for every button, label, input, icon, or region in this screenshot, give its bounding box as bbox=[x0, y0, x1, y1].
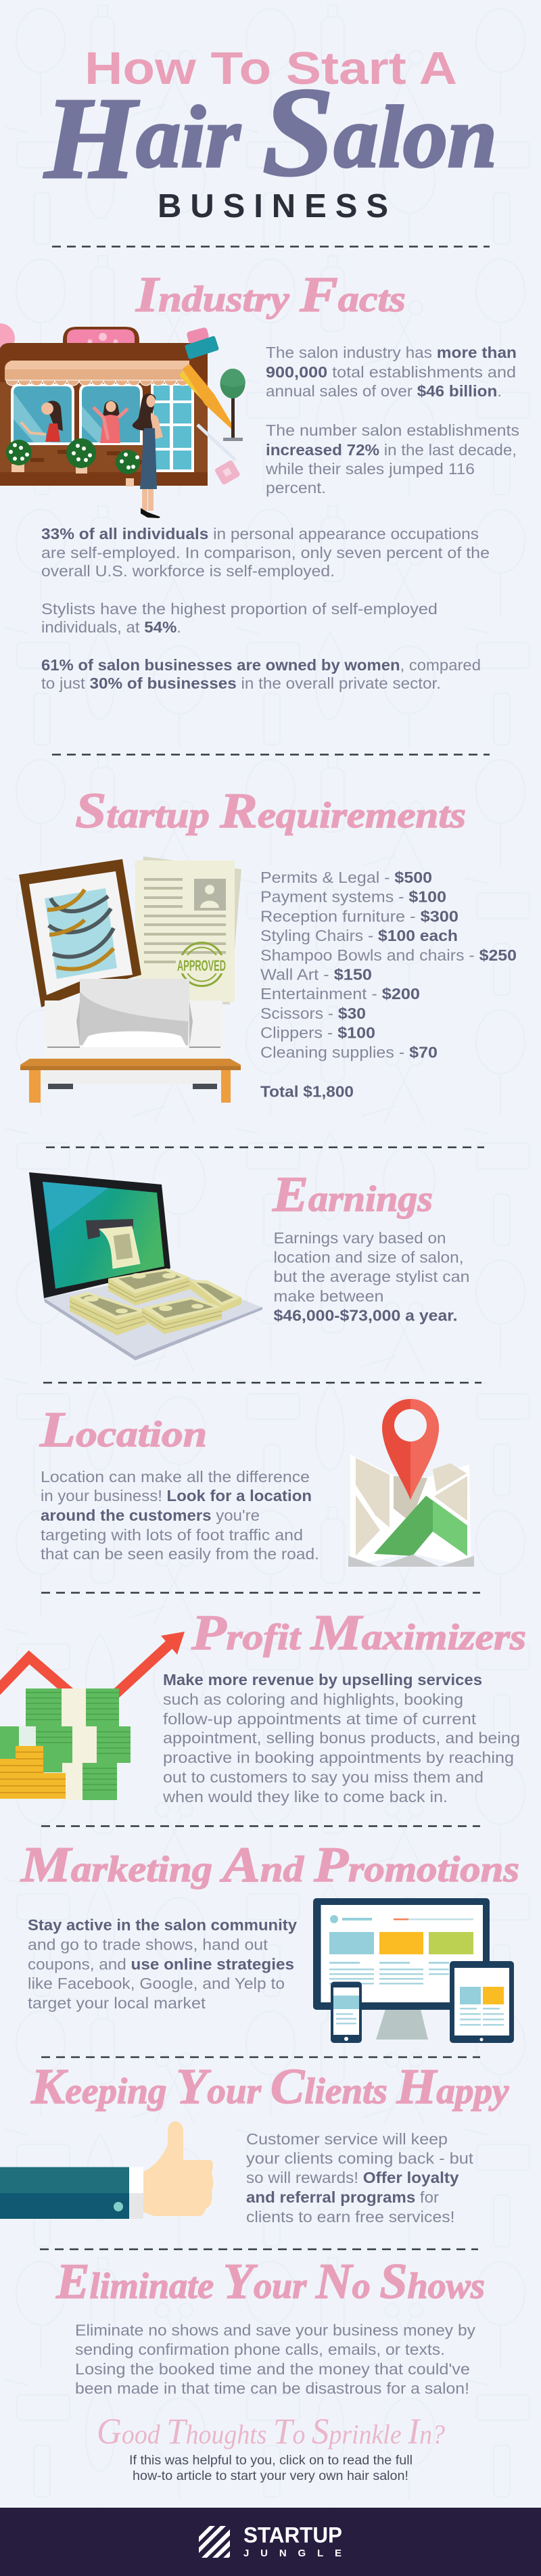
topiary bbox=[220, 369, 245, 441]
heading: industry facts: Industry Facts bbox=[135, 267, 406, 323]
towels bbox=[185, 327, 219, 360]
text block: self-employment facts: Stylists have the highest proportion of self-employed bbox=[41, 600, 438, 618]
text block: marketing bbox=[28, 1916, 297, 2012]
title line: how to start a: How To Start A bbox=[85, 43, 457, 94]
text block: marketing: and go to trade shows, hand out bbox=[28, 1936, 268, 1954]
woman in middle window bbox=[93, 400, 128, 443]
heading: earnings: Earnings bbox=[272, 1167, 433, 1222]
title line: business: BUSINESS bbox=[158, 188, 388, 225]
text block: no shows: sending confirmation phone calls, emails, or texts. bbox=[75, 2341, 445, 2358]
text block: earnings: Earnings vary based on bbox=[273, 1229, 446, 1247]
gold coins bbox=[0, 1746, 66, 1799]
logo wordmark: JUNGLE bbox=[243, 2548, 342, 2559]
logo wordmark: STARTUP bbox=[243, 2523, 342, 2548]
text block: profit maximizers bbox=[162, 1671, 520, 1806]
text block: client rewards: and referral programs for bbox=[246, 2188, 439, 2206]
list: startup costs: Entertainment - $200 bbox=[260, 985, 420, 1003]
list: startup costs: Reception furniture - $300 bbox=[260, 907, 458, 925]
woman in front bbox=[133, 394, 163, 518]
approved stamp: APPROVED bbox=[177, 957, 226, 974]
money stack: left bbox=[70, 1292, 147, 1335]
list: startup costs: Payment systems - $100 bbox=[260, 888, 446, 906]
illustration: money and growth arrow bbox=[0, 1632, 185, 1800]
startup jungle logo bbox=[199, 2523, 342, 2559]
title line: hair salon: S bbox=[262, 61, 334, 202]
text block: earnings: location and size of salon, bbox=[273, 1249, 464, 1266]
text block: location bbox=[41, 1468, 319, 1563]
text block: client rewards: clients to earn free services! bbox=[246, 2208, 454, 2226]
text block: location: that can be seen easily from the road. bbox=[41, 1545, 319, 1563]
heading: startup requirements: Startup Requirements bbox=[75, 783, 466, 839]
heading: keeping your clients happy: Keeping Your Clients Happy bbox=[30, 2059, 510, 2115]
heading: marketing and promotions: Marketing And Promotions bbox=[20, 1837, 519, 1893]
text block: earnings bbox=[273, 1229, 469, 1325]
text block: location: Location can make all the difference bbox=[41, 1468, 310, 1486]
text block: self-employment facts: 61% of salon businesses are owned by women , compared bbox=[41, 656, 481, 674]
heading: eliminate your no shows: Eliminate Your No Shows bbox=[55, 2254, 485, 2309]
list: startup costs bbox=[260, 869, 517, 1100]
money stack: top centre bbox=[108, 1268, 189, 1306]
picture frame bbox=[19, 859, 141, 1007]
logo icon bbox=[199, 2526, 230, 2558]
location pin bbox=[382, 1399, 439, 1500]
desktop monitor bbox=[313, 1898, 490, 2040]
text block: self-employment facts: are self-employed. In comparison, only seven percent of the bbox=[41, 544, 490, 561]
text block: salon statistics: The number salon establishments bbox=[266, 421, 519, 439]
spray bottle bbox=[197, 425, 241, 486]
title line: hair salon: H bbox=[43, 74, 140, 203]
text block: profit maximizers: appointment, selling bonus products, and being bbox=[163, 1729, 520, 1747]
text block: self-employment facts bbox=[41, 525, 490, 692]
text block: profit maximizers: Make more revenue by upselling services bbox=[163, 1671, 482, 1688]
heading: good thoughts to sprinkle in: Good Thoughts To Sprinkle In? bbox=[97, 2411, 445, 2452]
text block: profit maximizers: when would they like to come back in. bbox=[162, 1788, 448, 1806]
text block: client rewards: so will rewards! Offer loyalty bbox=[246, 2169, 459, 2186]
text block: marketing: like Facebook, Google, and Yelp to bbox=[28, 1975, 285, 1992]
title bbox=[43, 43, 497, 225]
text block: closing note bbox=[129, 2454, 413, 2483]
text block: self-employment facts: overall U.S. workforce is self-employed. bbox=[41, 562, 335, 580]
list: startup costs: Wall Art - $150 bbox=[260, 966, 372, 984]
money stack: front right bbox=[142, 1297, 222, 1334]
text block: salon statistics: increased 72% in the last decade, bbox=[266, 441, 517, 459]
heading: profit maximizers: Profit Maximizers bbox=[191, 1605, 526, 1661]
text block: salon statistics: while their sales jumped 116 bbox=[265, 460, 475, 478]
text block: self-employment facts: to just 30% of businesses in the overall private sector. bbox=[41, 674, 441, 692]
text block: no shows bbox=[75, 2322, 476, 2397]
illustration: responsive devices bbox=[313, 1898, 514, 2043]
hair brush bbox=[179, 364, 233, 429]
text block: profit maximizers: proactive in booking appointments by reaching bbox=[163, 1749, 514, 1766]
text block: location: targeting with lots of foot traffic and bbox=[41, 1526, 303, 1544]
illustration: salon storefront bbox=[0, 323, 245, 518]
woman in left window bbox=[21, 400, 63, 442]
footer band bbox=[0, 2508, 541, 2576]
wooden table bbox=[20, 1059, 241, 1103]
text block: closing note: how-to article to start your very own hair salon! bbox=[133, 2469, 408, 2483]
text block: earnings: $46,000-$73,000 a year. bbox=[273, 1307, 457, 1325]
total: Total $1,800 bbox=[260, 1082, 354, 1100]
text block: profit maximizers: out to customers to say you miss them and bbox=[163, 1768, 484, 1786]
text block: no shows: Eliminate no shows and save your business money by bbox=[75, 2322, 476, 2339]
title line: hair salon: alon bbox=[334, 89, 497, 186]
tablet bbox=[450, 1961, 514, 2043]
banknote stacks bbox=[0, 1688, 131, 1800]
text block: client rewards bbox=[246, 2130, 474, 2226]
text block: client rewards: Customer service will keep bbox=[246, 2130, 448, 2148]
text block: profit maximizers: such as coloring and highlights, booking bbox=[163, 1690, 463, 1708]
text block: location: around the customers you're bbox=[41, 1506, 260, 1524]
text block: earnings: but the average stylist can bbox=[273, 1268, 469, 1285]
approved stamp bbox=[176, 943, 227, 986]
text block: salon statistics: annual sales of over $46 billion . bbox=[266, 382, 502, 400]
smartphone bbox=[331, 1982, 362, 2043]
illustration: thumbs up bbox=[0, 2121, 213, 2219]
text block: salon statistics: The salon industry has more than bbox=[266, 344, 517, 361]
text block: marketing: Stay active in the salon community bbox=[28, 1916, 297, 1934]
list: startup costs: Permits & Legal - $500 bbox=[260, 869, 432, 886]
list: startup costs: Shampoo Bowls and chairs - $250 bbox=[260, 946, 517, 964]
bushes with pots bbox=[6, 438, 140, 486]
text block: marketing: coupons, and use online strategies bbox=[28, 1956, 294, 1973]
text block: closing note: If this was helpful to you, click on to read the full bbox=[129, 2454, 413, 2468]
list: startup costs: Cleaning supplies - $70 bbox=[260, 1043, 438, 1061]
heading: location: Location bbox=[39, 1402, 207, 1458]
list: startup costs: Scissors - $30 bbox=[260, 1005, 366, 1022]
illustration: map with pin bbox=[348, 1399, 474, 1567]
money stack: rear right bbox=[189, 1280, 241, 1312]
illustration: laptop with money bbox=[29, 1172, 262, 1360]
title line: hair salon: air bbox=[136, 89, 262, 186]
logo wordmark bbox=[243, 2523, 342, 2559]
text block: no shows: been made in that time can be disastrous for a salon! bbox=[75, 2380, 469, 2397]
growth arrow bbox=[0, 1632, 185, 1695]
sofa bbox=[45, 979, 222, 1059]
list: startup costs: Styling Chairs - $100 each bbox=[260, 927, 458, 944]
text block: no shows: Losing the booked time and the money that could've bbox=[75, 2360, 470, 2378]
permit document bbox=[135, 856, 241, 1005]
text block: salon statistics: percent. bbox=[266, 479, 326, 497]
text block: marketing: target your local market bbox=[28, 1994, 206, 2012]
text block: earnings: make between bbox=[273, 1287, 384, 1305]
text block: self-employment facts: individuals, at 54%. bbox=[41, 618, 181, 636]
text block: salon statistics: 900,000 total establishments and bbox=[266, 363, 516, 381]
text block: client rewards: your clients coming back - but bbox=[246, 2149, 474, 2167]
text block: salon statistics bbox=[265, 344, 519, 497]
text block: self-employment facts: 33% of all individuals in personal appearance occupations bbox=[41, 525, 479, 543]
list: startup costs: Clippers - $100 bbox=[260, 1024, 375, 1042]
text block: profit maximizers: follow-up appointments at time of current bbox=[163, 1710, 477, 1728]
text block: location: in your business! Look for a location bbox=[41, 1487, 312, 1504]
illustration: frame, permit and sofa bbox=[19, 856, 241, 1103]
